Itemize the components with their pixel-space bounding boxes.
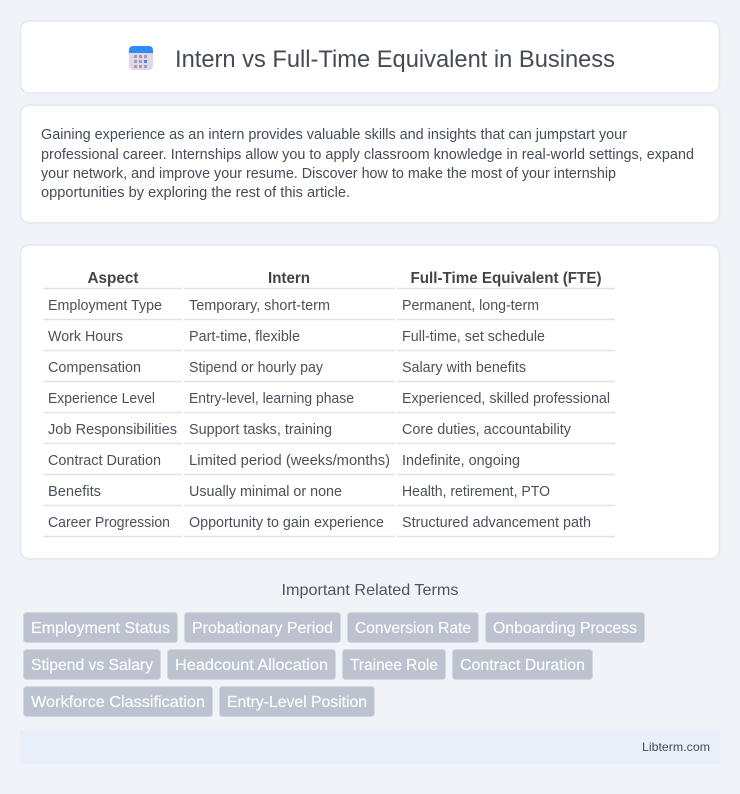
tag: Entry-Level Position: [227, 694, 367, 711]
intro panel: [20, 105, 720, 223]
table header: [88, 270, 602, 287]
row: employment type: Temporary, short-term: [189, 298, 330, 314]
related terms heading: Important Related Terms: [282, 582, 458, 599]
tag: Employment Status: [31, 620, 170, 637]
tag: Probationary Period: [192, 620, 333, 637]
row: benefits: Benefits: [48, 484, 101, 500]
row: work hours: [48, 329, 545, 345]
row: work hours: Work Hours: [48, 329, 123, 345]
row: career progression: Career Progression: [48, 515, 170, 531]
row: career progression: Opportunity to gain experience: [189, 515, 384, 531]
row: compensation: [48, 360, 526, 376]
row: contract duration: Indefinite, ongoing: [402, 453, 520, 469]
intro text: [41, 127, 694, 201]
tag: [184, 612, 340, 642]
row: experience level: Experience Level: [48, 391, 155, 407]
row: employment type: Employment Type: [48, 298, 162, 314]
row: contract duration: Contract Duration: [48, 453, 161, 469]
row: employment type: [48, 298, 539, 314]
footer source: Libterm.com: [642, 740, 710, 754]
title: Intern vs Full-Time Equivalent in Business: [175, 46, 615, 73]
tag: [220, 686, 374, 716]
row: compensation: Stipend or hourly pay: [189, 360, 324, 376]
icon: calendar: [129, 46, 153, 70]
tag: [24, 686, 212, 716]
tag: [486, 612, 644, 642]
row: compensation: Compensation: [48, 360, 141, 376]
row: experience level: Experienced, skilled professional: [402, 391, 610, 407]
intro text: opportunities by exploring the rest of this article.: [41, 185, 350, 201]
tag: Trainee Role: [350, 657, 438, 674]
footer bar: [20, 730, 720, 764]
row: work hours: Part-time, flexible: [189, 329, 300, 345]
tag: [168, 650, 336, 680]
row: job responsibilities: Job Responsibilities: [48, 422, 177, 438]
tag: Stipend vs Salary: [31, 657, 153, 674]
row: contract duration: [48, 453, 520, 469]
table header: Full-Time Equivalent (FTE): [410, 270, 602, 287]
row: employment type: Permanent, long-term: [402, 298, 539, 314]
row: job responsibilities: [48, 422, 572, 438]
comparison table panel: [20, 245, 720, 559]
row: benefits: Health, retirement, PTO: [402, 484, 550, 500]
row: contract duration: Limited period (weeks/months): [189, 453, 390, 469]
header card: [20, 21, 720, 93]
row: benefits: [48, 484, 550, 500]
tag: Headcount Allocation: [175, 657, 328, 674]
row: experience level: [48, 391, 610, 407]
tag: [342, 650, 446, 680]
row: experience level: Entry-level, learning phase: [189, 391, 354, 407]
row: compensation: Salary with benefits: [402, 360, 526, 376]
tag: [348, 612, 478, 642]
table header: Aspect: [88, 270, 139, 287]
related terms tags: [24, 612, 644, 716]
row: benefits: Usually minimal or none: [189, 484, 342, 500]
row: job responsibilities: Support tasks, training: [189, 422, 332, 438]
tag: Contract Duration: [460, 657, 585, 674]
row: work hours: Full-time, set schedule: [402, 329, 545, 345]
row: job responsibilities: Core duties, accountability: [402, 422, 572, 438]
tag: Onboarding Process: [493, 620, 637, 637]
tag: Workforce Classification: [31, 694, 205, 711]
table header: Intern: [268, 270, 310, 287]
intro text: Gaining experience as an intern provides valuable skills and insights that can jumpstart your: [41, 127, 627, 143]
intro text: professional career. Internships allow you to apply classroom knowledge in real-world settings, expand: [41, 147, 694, 163]
tag: Conversion Rate: [355, 620, 471, 637]
row: career progression: Structured advancement path: [402, 515, 591, 531]
intro text: your network, and improve your resume. Discover how to make the most of your internship: [41, 166, 616, 182]
tag: [24, 612, 178, 642]
row: career progression: [48, 515, 591, 531]
tag: [24, 650, 160, 680]
tag: [452, 650, 592, 680]
